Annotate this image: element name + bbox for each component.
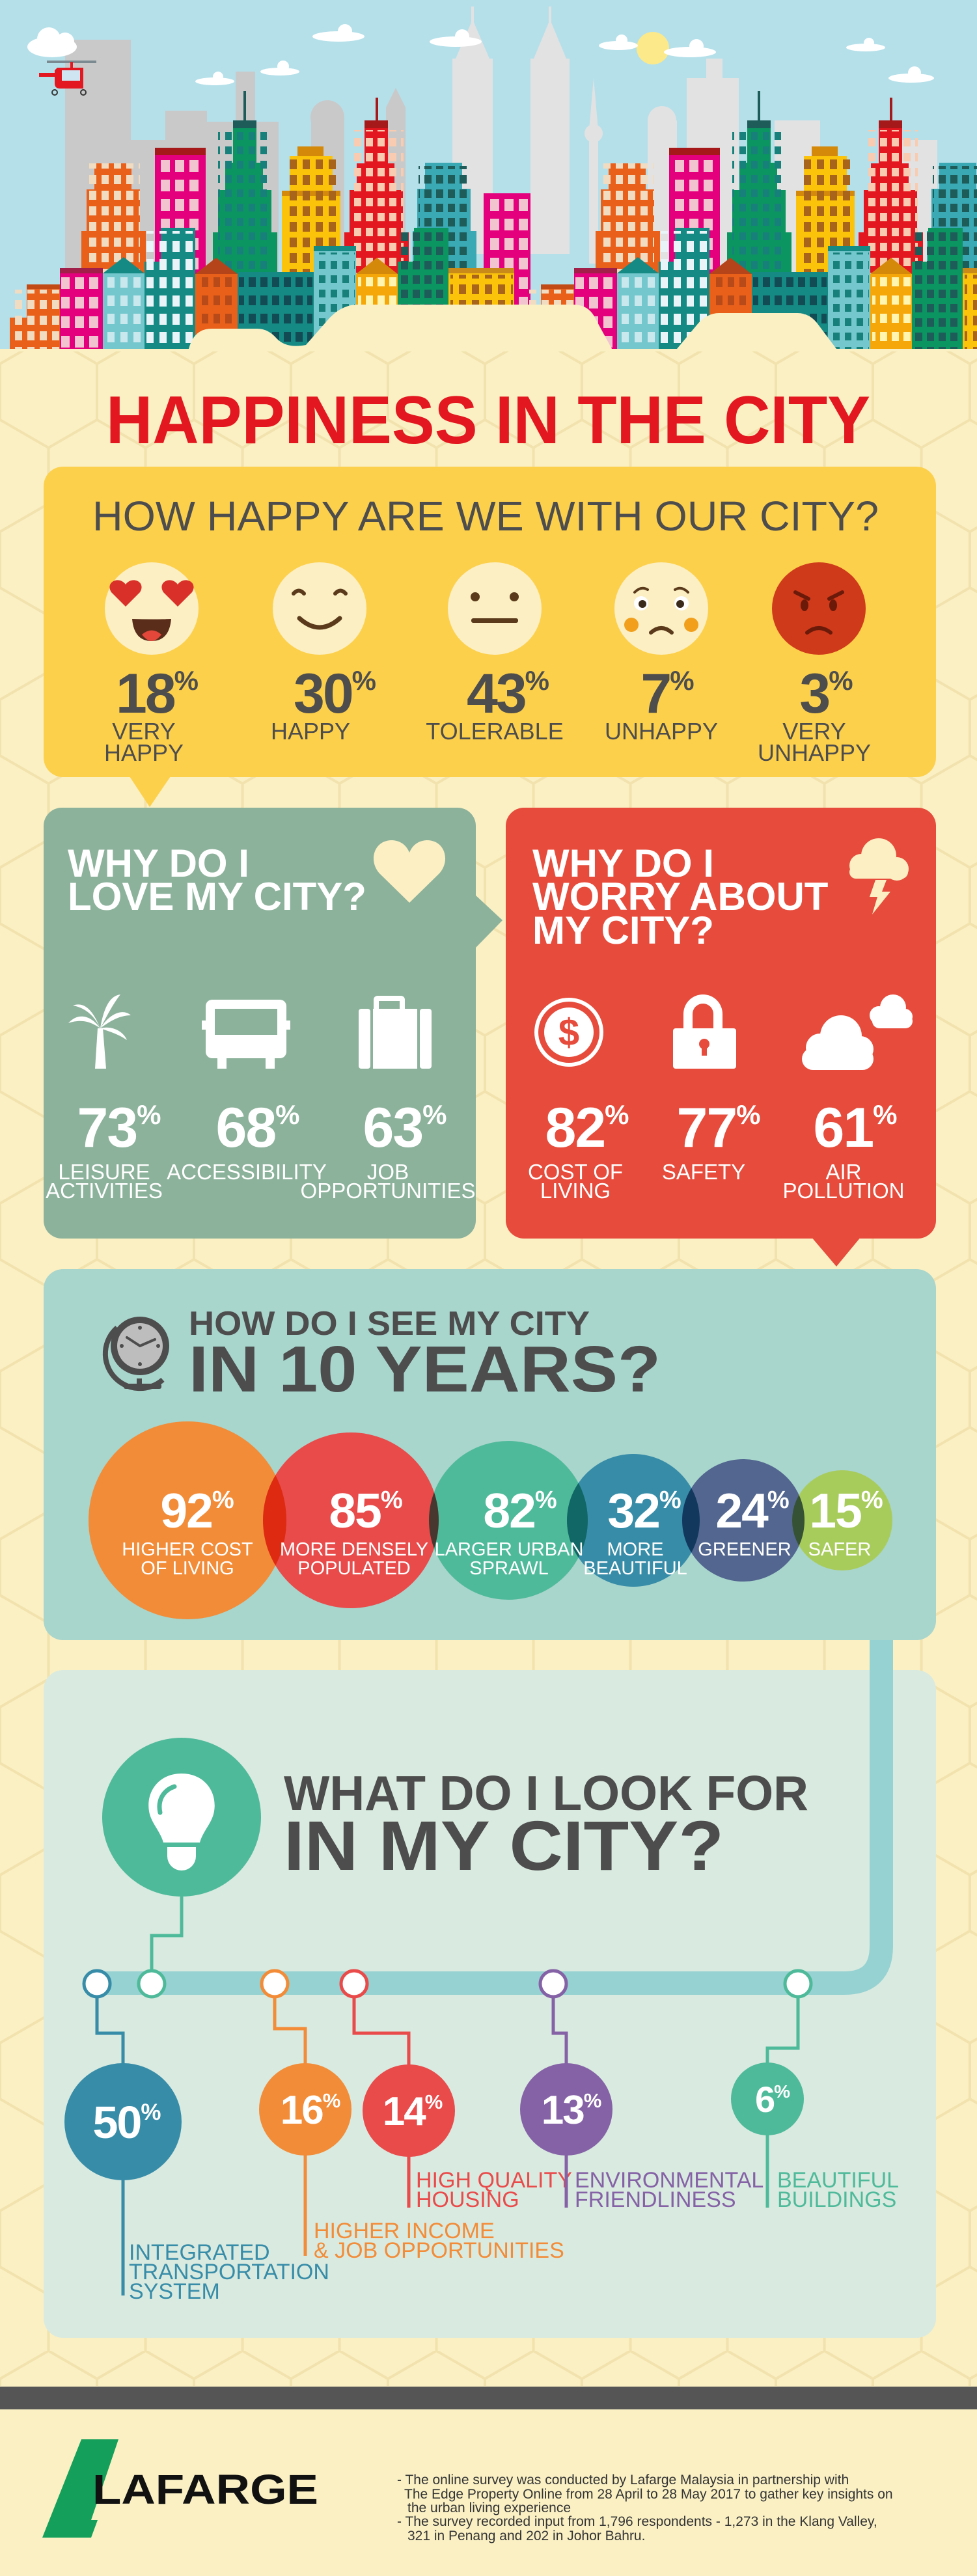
stat: 82% cost of living: COST OF xyxy=(528,1160,623,1184)
stat: 7% unhappy xyxy=(605,663,718,745)
stat: 30% happy: % xyxy=(352,665,376,696)
heading: look for xyxy=(284,1766,808,1885)
stat: 82% cost of living: 82 xyxy=(545,1097,605,1159)
item: 50% integrated transportation: INTEGRATED xyxy=(129,2240,270,2265)
heading: 10 years xyxy=(189,1305,661,1406)
bubble chart: HIGHER COST xyxy=(122,1539,253,1560)
stat: 61% air pollution: POLLUTION xyxy=(782,1179,905,1203)
item: 16% higher income: HIGHER INCOME xyxy=(314,2219,495,2243)
bubble chart: % xyxy=(659,1487,681,1514)
panel: why do I love my city xyxy=(44,808,502,1239)
stat: 68% accessibility: 68 xyxy=(215,1097,275,1159)
stat: 43% tolerable: TOLERABLE xyxy=(426,718,564,745)
heading: 10 years: IN 10 YEARS? xyxy=(189,1333,661,1406)
stat: 7% unhappy: 7 xyxy=(640,663,670,725)
item: 6% beautiful buildings: BEAUTIFUL xyxy=(777,2168,899,2193)
icon: dollar coin xyxy=(536,1000,601,1065)
footnote text: the urban living experience xyxy=(407,2501,571,2515)
heading: look for: IN MY CITY? xyxy=(284,1806,724,1885)
stat: 68% accessibility xyxy=(167,1097,327,1184)
stat: 18% very happy: VERY xyxy=(112,718,176,745)
stat: 61% air pollution: % xyxy=(873,1099,897,1130)
stat: 63% job: 63 xyxy=(363,1097,422,1159)
item: 50% integrated transportation: % xyxy=(141,2100,161,2125)
stat: 63% job xyxy=(301,1097,475,1203)
bubble chart: 32 xyxy=(607,1483,659,1538)
item: 14% high quality housing xyxy=(341,1971,572,2212)
heading: love: WHY DO I xyxy=(68,842,249,885)
bubble chart: GREENER xyxy=(698,1539,791,1560)
icon: storm cloud xyxy=(849,838,909,914)
bubble chart: POPULATED xyxy=(297,1558,411,1579)
heading: worry: WHY DO I xyxy=(532,842,714,885)
stat: 77% safety xyxy=(662,1097,760,1184)
stat: 3% very unhappy: UNHAPPY xyxy=(758,739,871,766)
footnote text xyxy=(397,2473,893,2543)
stat: 82% cost of living: % xyxy=(605,1099,629,1130)
pipe line xyxy=(94,1640,881,1983)
item: 14% high quality housing: HIGH QUALITY xyxy=(416,2168,572,2193)
stat: 63% job: % xyxy=(422,1099,447,1130)
bubble chart: 92 xyxy=(160,1483,212,1538)
stat: 68% accessibility: % xyxy=(275,1099,299,1130)
heading: worry: WORRY ABOUT xyxy=(532,875,828,918)
bubble chart: % xyxy=(212,1487,234,1514)
stat: 43% tolerable: 43 xyxy=(467,663,525,725)
stat: 3% very unhappy: 3 xyxy=(799,663,829,725)
footnote text: - The survey recorded input from 1,796 respondents - 1,273 in the Klang Valley, xyxy=(397,2514,877,2529)
stat: 73% leisure: 73 xyxy=(77,1097,137,1159)
item: 50% integrated transportation: 50 xyxy=(92,2097,141,2148)
bubble chart: % xyxy=(381,1487,402,1514)
icon: clouds xyxy=(802,994,913,1070)
icon: tolerable face xyxy=(448,562,542,655)
stat: 73% leisure: ACTIVITIES xyxy=(46,1179,163,1203)
stat: 7% unhappy: % xyxy=(670,665,694,696)
stat: 73% leisure: % xyxy=(137,1099,161,1130)
heading: how happy: HOW HAPPY ARE WE WITH OUR CITY? xyxy=(92,493,879,540)
bubble chart: MORE DENSELY xyxy=(280,1539,428,1560)
stat: 63% job: OPPORTUNITIES xyxy=(301,1179,475,1203)
stat: 43% tolerable: % xyxy=(525,665,549,696)
item: 6% beautiful buildings xyxy=(731,1971,899,2212)
stat: 73% leisure: LEISURE xyxy=(58,1160,150,1184)
stat: 43% tolerable xyxy=(426,663,564,745)
icon: happy face xyxy=(273,562,366,655)
bubble chart: % xyxy=(767,1487,789,1514)
front row xyxy=(10,318,29,349)
stat: 68% accessibility: ACCESSIBILITY xyxy=(167,1160,327,1184)
heading: love xyxy=(68,842,366,918)
item: 16% higher income xyxy=(259,1971,564,2263)
footnote text: 321 in Penang and 202 in Johor Bahru. xyxy=(407,2528,645,2543)
heading: 10 years: HOW DO I SEE MY CITY xyxy=(189,1305,590,1343)
stat: 7% unhappy: UNHAPPY xyxy=(605,718,718,745)
sun and clouds xyxy=(637,32,669,64)
bubble chart: 24 xyxy=(715,1483,767,1538)
stat: 30% happy: 30 xyxy=(294,663,352,725)
cream hills xyxy=(0,305,977,351)
item: 14% high quality housing: % xyxy=(425,2090,443,2113)
panel: what do I look for xyxy=(44,1640,936,2338)
item: 6% beautiful buildings: % xyxy=(774,2081,790,2102)
icon: bus xyxy=(202,1000,290,1069)
bubble chart: MORE xyxy=(607,1539,664,1560)
stat: 77% safety: % xyxy=(736,1099,760,1130)
stat: 3% very unhappy: % xyxy=(829,665,853,696)
icon: helicopter xyxy=(39,61,96,95)
bubble chart: 15 xyxy=(809,1483,861,1538)
bubble chart: 85 xyxy=(329,1483,381,1538)
stat: 18% very happy xyxy=(104,663,199,766)
item: 16% higher income: & JOB OPPORTUNITIES xyxy=(314,2238,564,2263)
stat: 3% very unhappy xyxy=(758,663,871,766)
icon: padlock xyxy=(673,994,736,1069)
stat: 77% safety: 77 xyxy=(676,1097,736,1159)
icon: very unhappy face xyxy=(772,562,866,655)
item: 6% beautiful buildings: BUILDINGS xyxy=(777,2187,896,2212)
footer bar xyxy=(0,2387,977,2409)
stat: 82% cost of living: LIVING xyxy=(540,1179,611,1203)
heading: worry xyxy=(532,842,828,952)
stat: 18% very happy: % xyxy=(174,665,199,696)
bubble chart: SPRAWL xyxy=(469,1558,549,1579)
panel: how happy are we xyxy=(44,467,936,807)
light grey towers xyxy=(452,7,937,303)
bubble chart: LARGER URBAN xyxy=(435,1539,583,1560)
skyline illustration xyxy=(0,0,977,351)
footnote text: The Edge Property Online from 28 April to 28 May 2017 to gather key insights on xyxy=(404,2487,893,2502)
icon: suitcase xyxy=(359,996,432,1069)
item: 14% high quality housing: HOUSING xyxy=(416,2187,519,2212)
stat: 61% air pollution xyxy=(782,1097,905,1203)
item: 50% integrated transportation xyxy=(64,1971,329,2304)
stat: 30% happy: HAPPY xyxy=(271,718,350,745)
item: 50% integrated transportation: SYSTEM xyxy=(129,2279,220,2304)
item: 6% beautiful buildings: 6 xyxy=(755,2079,774,2120)
item: 13% environmental friendliness: % xyxy=(584,2089,601,2112)
connector: bulb to line xyxy=(152,1897,182,1969)
stat: 82% cost of living xyxy=(528,1097,629,1203)
bubble chart: SAFER xyxy=(808,1539,871,1560)
item: 13% environmental friendliness: 13 xyxy=(542,2088,584,2133)
logo: Lafarge: LAFARGE xyxy=(92,2466,318,2513)
panel: how do I see my city in 10 years xyxy=(44,1269,936,1640)
stat: 63% job: JOB xyxy=(367,1160,409,1184)
heading: look for: WHAT DO I LOOK FOR xyxy=(284,1766,808,1820)
icon: globe clock xyxy=(105,1317,169,1389)
grey buildings xyxy=(65,40,406,317)
icon: very happy face xyxy=(105,562,199,655)
footnote text: - The online survey was conducted by Lafarge Malaysia in partnership with xyxy=(397,2473,849,2487)
item: 13% environmental friendliness: ENVIRONMENTAL xyxy=(575,2168,764,2193)
stat: 30% happy xyxy=(271,663,376,745)
item: 50% integrated transportation: TRANSPORTATION xyxy=(129,2260,329,2284)
stat: 3% very unhappy: VERY xyxy=(782,718,846,745)
icon: unhappy face xyxy=(614,562,708,655)
bubble chart: OF LIVING xyxy=(141,1558,234,1579)
logo: Lafarge xyxy=(42,2439,318,2538)
item: 16% higher income: % xyxy=(323,2089,340,2112)
bubble chart: % xyxy=(535,1487,557,1514)
icon: heart xyxy=(374,840,445,903)
title: HAPPINESS IN THE CITY xyxy=(106,383,870,458)
item: 13% environmental friendliness xyxy=(520,1971,764,2212)
stat: 61% air pollution: AIR xyxy=(825,1160,862,1184)
heading: love: LOVE MY CITY? xyxy=(68,875,366,918)
stat: 73% leisure xyxy=(46,1097,163,1203)
coloured buildings left set xyxy=(10,91,530,349)
item: 14% high quality housing: 14 xyxy=(383,2089,425,2134)
bubble chart: BEAUTIFUL xyxy=(583,1558,687,1579)
stat: 18% very happy: HAPPY xyxy=(104,739,184,766)
item: 16% higher income: 16 xyxy=(281,2088,323,2133)
item: 13% environmental friendliness: FRIENDLINESS xyxy=(575,2187,736,2212)
icon: lightbulb xyxy=(102,1738,261,1897)
panel: why do I worry xyxy=(506,808,936,1267)
bubble chart: % xyxy=(861,1487,883,1514)
bubble chart xyxy=(89,1421,892,1619)
stat: 77% safety: SAFETY xyxy=(662,1160,745,1184)
icon: palm tree xyxy=(68,994,131,1069)
bubble chart: 82 xyxy=(483,1483,535,1538)
icon: dollar coin: $ xyxy=(558,1011,579,1054)
stat: 18% very happy: 18 xyxy=(116,663,174,725)
stat: 61% air pollution: 61 xyxy=(813,1097,873,1159)
heading: worry: MY CITY? xyxy=(532,909,714,952)
